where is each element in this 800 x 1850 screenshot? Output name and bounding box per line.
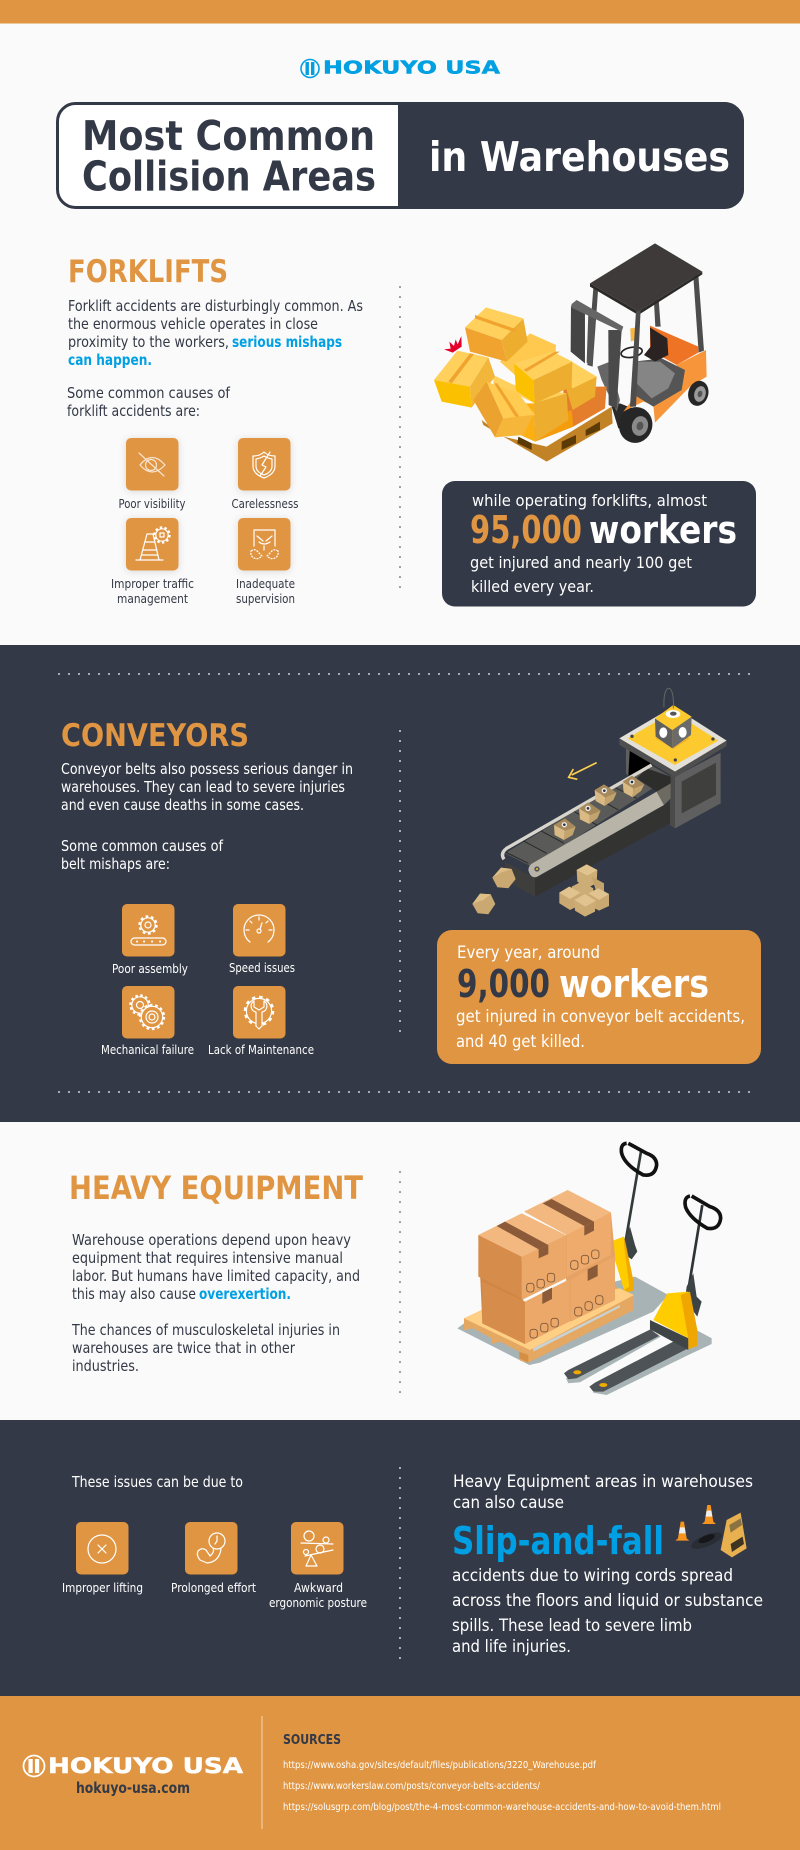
illustration: conveyor belt [472, 688, 727, 917]
text block: heavy equipment intro: overexertion. [199, 1285, 291, 1303]
text block: heavy equipment intro: labor. But humans have limited capacity, and [72, 1267, 360, 1285]
panel: footer [0, 1696, 800, 1850]
panel: conveyors [0, 645, 800, 1122]
panel: forklifts [67, 243, 756, 606]
icon: prolonged effort [185, 1522, 238, 1574]
label: awkward ergonomic posture [269, 1580, 367, 1610]
callout: conveyor statistic: get injured in conveyor belt accidents, [456, 1007, 745, 1027]
icon: improper traffic management [126, 518, 178, 570]
text block: forklift causes intro [67, 384, 231, 420]
label: poor visibility: Poor visibility [118, 496, 186, 511]
panel: issues and slip-and-fall [0, 1420, 800, 1696]
label: improper traffic management: management [117, 591, 188, 606]
label: improper traffic management [111, 576, 194, 606]
text: heavy equipment hazard intro: Heavy Equipment areas in warehouses [453, 1472, 753, 1492]
text block: conveyors intro: warehouses. They can lead to severe injuries [61, 778, 345, 796]
callout: forklift statistic: get injured and nearly 100 get [470, 553, 692, 572]
icon: carelessness [238, 438, 290, 490]
label: inadequate supervision [236, 576, 295, 606]
icon: lack of maintenance [233, 986, 286, 1038]
text block: heavy equipment intro: this may also cause [72, 1285, 196, 1303]
label: speed issues: Speed issues [229, 960, 295, 975]
text block: forklift causes intro: Some common causes of [67, 384, 231, 402]
label: poor assembly: Poor assembly [112, 961, 189, 976]
icon: mechanical failure [122, 986, 174, 1038]
text block: forklift intro: proximity to the workers, [68, 333, 229, 351]
text block: heavy equipment intro: equipment that requires intensive manual [72, 1249, 343, 1267]
icon: improper lifting [76, 1522, 128, 1574]
footer website: hokuyo-usa.com [76, 1779, 190, 1797]
header logo: HOKUYO USA [323, 58, 500, 78]
heading: conveyors: CONVEYORS [61, 718, 249, 754]
text block: musculoskeletal fact: The chances of musculoskeletal injuries in [71, 1321, 340, 1339]
callout: conveyor statistic: and 40 get killed. [456, 1032, 585, 1052]
text block: conveyors intro [61, 760, 353, 814]
label: mechanical failure: Mechanical failure [101, 1042, 194, 1057]
text block: heavy equipment intro: Warehouse operations depend upon heavy [72, 1231, 351, 1249]
text block: forklift causes intro: forklift accidents are: [67, 402, 200, 420]
icon: poor visibility [126, 438, 178, 490]
top accent bar [0, 0, 800, 24]
callout: forklift statistic [442, 481, 756, 606]
callout: forklift statistic: killed every year. [471, 577, 594, 596]
text block: musculoskeletal fact [71, 1321, 340, 1375]
callout: conveyor statistic: workers [559, 962, 709, 1006]
illustration: forklift with falling boxes [434, 243, 711, 462]
text block: forklift intro [68, 297, 363, 369]
illustration: pallet jack with boxes [457, 1143, 721, 1395]
callout: forklift statistic: workers [589, 508, 737, 552]
sources list: https://solusgrp.com/blog/post/the-4-most-common-warehouse-accidents-and-how-to-avoid-them.html [283, 1802, 721, 1813]
callout: conveyor statistic [437, 930, 761, 1064]
label: inadequate supervision: supervision [236, 591, 295, 606]
label: improper lifting: Improper lifting [62, 1580, 143, 1595]
label: inadequate supervision: Inadequate [236, 576, 295, 591]
title banner: Collision Areas [82, 152, 376, 200]
label: awkward ergonomic posture: Awkward [294, 1580, 343, 1595]
text: slip-and-fall explanation: and life injuries. [452, 1637, 571, 1657]
text block: forklift intro: Forklift accidents are disturbingly common. As [68, 297, 363, 315]
heading: heavy equipment: HEAVY EQUIPMENT [69, 1169, 363, 1207]
text: heavy equipment hazard intro [453, 1472, 753, 1513]
text block: forklift intro: the enormous vehicle operates in close [68, 315, 318, 333]
text: heavy equipment hazard intro: can also cause [453, 1493, 564, 1513]
heading: forklifts: FORKLIFTS [68, 254, 228, 290]
callout: conveyor statistic: Every year, around [457, 943, 600, 963]
label: carelessness: Carelessness [232, 496, 298, 511]
text block: musculoskeletal fact: industries. [72, 1357, 139, 1375]
callout: forklift statistic: 95,000 [470, 508, 582, 552]
sources list: https://www.osha.gov/sites/default/files/publications/3220_Warehouse.pdf [283, 1760, 596, 1771]
label: prolonged effort: Prolonged effort [171, 1580, 256, 1595]
panel: heavy equipment [69, 1143, 721, 1395]
heading: slip-and-fall: Slip-and-fall [452, 1519, 664, 1563]
text: issues intro: These issues can be due to [71, 1473, 243, 1491]
text: slip-and-fall explanation: accidents due to wiring cords spread [452, 1566, 733, 1586]
text block: conveyors intro: and even cause deaths in some cases. [61, 796, 304, 814]
icon: poor assembly [122, 904, 174, 956]
sources list [283, 1760, 721, 1813]
label: lack of maintenance: Lack of Maintenance [208, 1042, 314, 1057]
text block: conveyor causes intro: belt mishaps are: [61, 855, 170, 873]
icon: cones and wet floor sign [675, 1505, 747, 1557]
text: slip-and-fall explanation: across the floors and liquid or substance [452, 1591, 763, 1611]
callout: forklift statistic: while operating forklifts, almost [472, 491, 707, 510]
icon: speed issues [233, 904, 286, 956]
label: awkward ergonomic posture: ergonomic posture [269, 1595, 367, 1610]
header logo [301, 58, 500, 78]
title banner: in Warehouses [429, 133, 730, 181]
sources list: https://www.workerslaw.com/posts/conveyor-belts-accidents/ [283, 1781, 541, 1792]
label: improper traffic management: Improper traffic [111, 576, 194, 591]
text block: forklift intro: can happen. [68, 351, 152, 369]
icon: awkward ergonomic posture [291, 1522, 344, 1574]
text block: musculoskeletal fact: warehouses are twice that in other [72, 1339, 296, 1357]
text block: conveyor causes intro [61, 837, 224, 873]
title banner [58, 102, 744, 209]
title banner: Most Common [82, 112, 375, 160]
text block: conveyors intro: Conveyor belts also possess serious danger in [61, 760, 353, 778]
text: slip-and-fall explanation: spills. These lead to severe limb [452, 1616, 692, 1636]
callout: conveyor statistic: 9,000 [457, 962, 550, 1006]
text: slip-and-fall explanation [452, 1566, 763, 1657]
icon: inadequate supervision [238, 518, 290, 570]
text block: heavy equipment intro [72, 1231, 360, 1303]
sources heading: SOURCES [283, 1733, 341, 1748]
text block: conveyor causes intro: Some common causes of [61, 837, 224, 855]
text block: forklift intro: serious mishaps [232, 333, 342, 351]
footer logo: HOKUYO USA [48, 1754, 244, 1778]
